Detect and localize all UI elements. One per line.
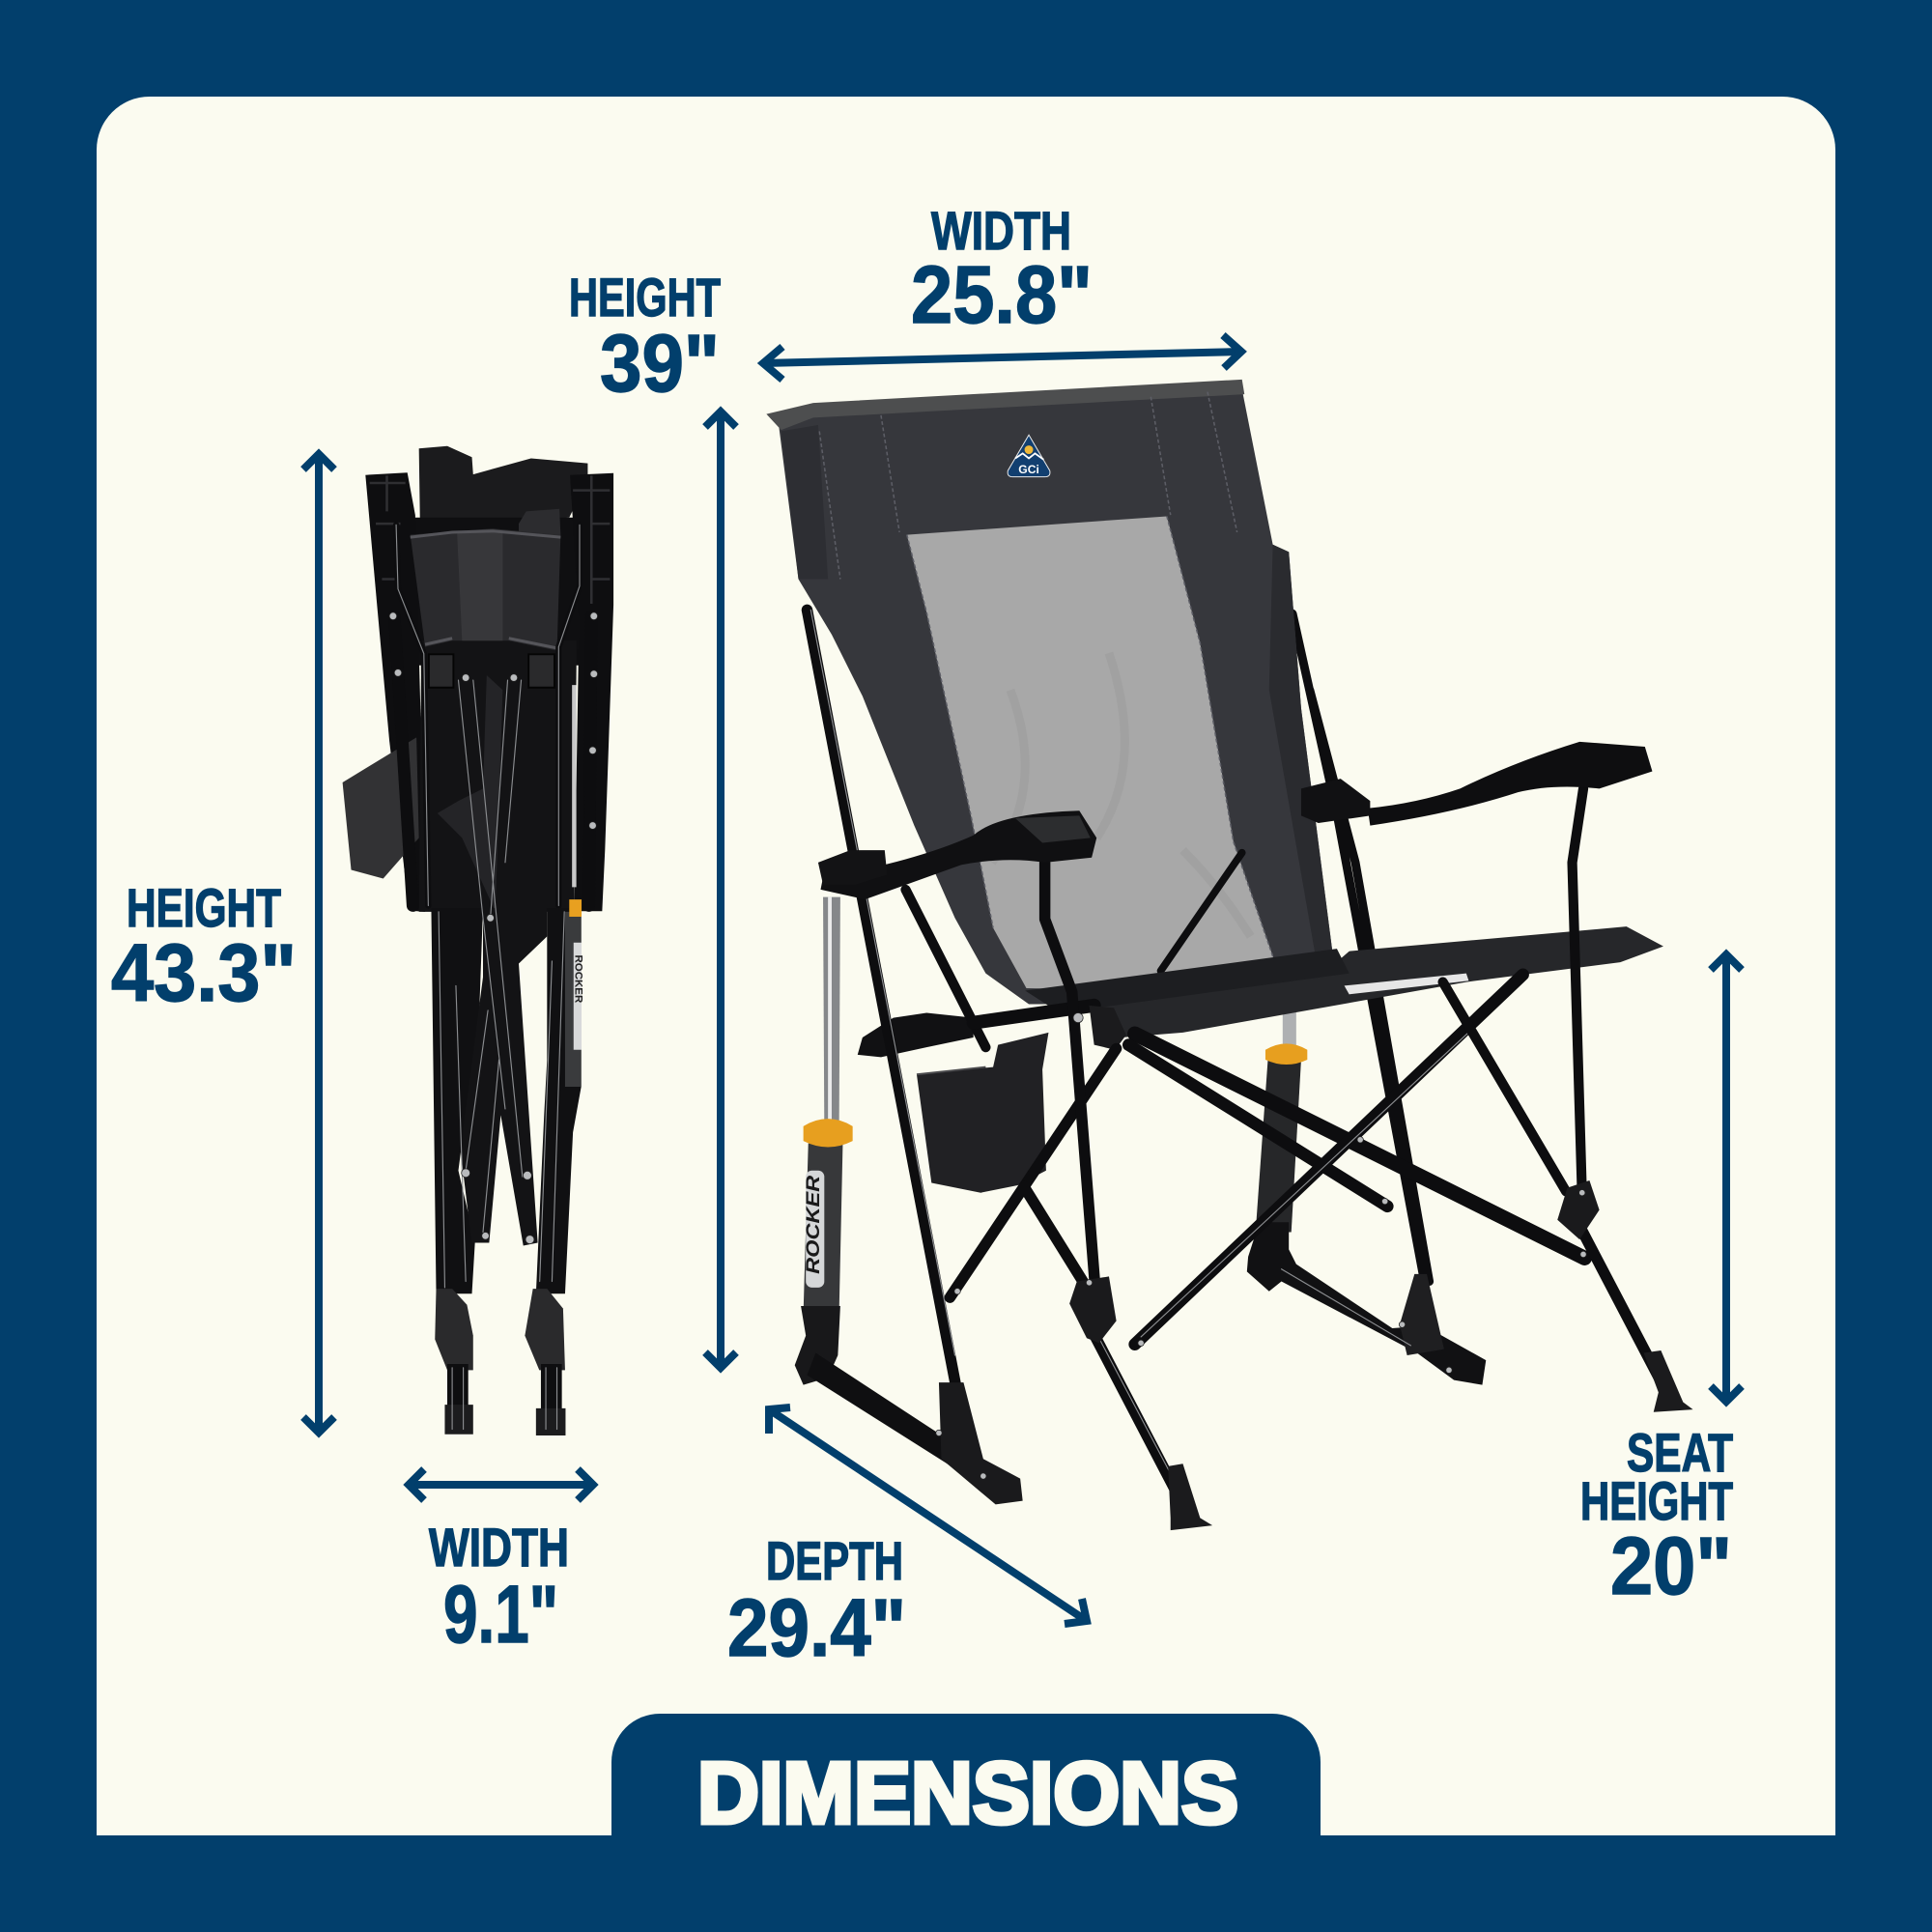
upright highlight xyxy=(810,610,955,1355)
chair bolts xyxy=(936,1012,1586,1479)
folded: left panel lattice xyxy=(370,475,406,579)
folded: dark backing behind pockets xyxy=(407,518,579,666)
label: seat height xyxy=(1580,1422,1733,1611)
folded: left plastic panel xyxy=(365,472,425,912)
arrow: depth xyxy=(769,1407,1087,1624)
rear rocker cylinder xyxy=(1256,1060,1301,1233)
label: depth: 29.4" xyxy=(727,1582,906,1673)
lower middle tube xyxy=(1024,1186,1087,1288)
right rear strut xyxy=(1443,982,1566,1191)
folded: chrome strip xyxy=(573,685,576,887)
front leg post xyxy=(1045,863,1096,1306)
folded: central dark body xyxy=(419,640,577,912)
folded: foot bars xyxy=(447,1364,562,1410)
label: chair width: 25.8" xyxy=(911,249,1093,340)
left inner tube xyxy=(905,890,985,1047)
seat label xyxy=(1345,974,1468,994)
folded: cup holder xyxy=(343,737,419,878)
rear chrome rod xyxy=(1283,1008,1296,1047)
front leg joint xyxy=(1069,1276,1117,1343)
rear bar highlight xyxy=(1282,1269,1410,1346)
front foot xyxy=(1168,1463,1212,1530)
folded: side rails xyxy=(394,616,591,905)
folded: flat highlights xyxy=(439,680,564,1288)
left armrest xyxy=(820,810,1096,899)
folded: rocker label xyxy=(573,943,584,1050)
left armrest top highlight xyxy=(1015,815,1091,842)
folded: plastic clips xyxy=(429,654,554,688)
seat fabric xyxy=(1094,926,1663,1037)
label: folded height xyxy=(111,877,297,1018)
cup holder xyxy=(917,1033,1048,1193)
folded: orange collar xyxy=(569,899,582,917)
title: DIMENSIONS xyxy=(697,1746,1238,1842)
rear leg joint xyxy=(1400,1274,1444,1355)
left hardware block xyxy=(858,1012,974,1057)
folded: pocket seams xyxy=(411,531,560,648)
left rocker cylinder xyxy=(804,1144,842,1314)
mesh panel xyxy=(907,516,1301,989)
GCI logo badge: GCi xyxy=(1018,463,1039,476)
arrow: chair height xyxy=(705,412,736,1368)
rear orange collar xyxy=(1265,1043,1307,1065)
ROCKER label xyxy=(804,1171,824,1288)
right side darker band xyxy=(1269,545,1334,967)
right front leg xyxy=(1579,1226,1663,1386)
title tab xyxy=(611,1714,1321,1842)
label: chair width xyxy=(911,200,1093,340)
folded: rocker label: ROCKER xyxy=(573,955,584,1004)
folded: feet xyxy=(444,1405,565,1435)
arrow: chair width xyxy=(763,335,1241,380)
mesh diagonal brace xyxy=(1161,853,1242,971)
right armrest xyxy=(1368,742,1652,826)
label: chair height: 39" xyxy=(600,318,720,409)
chrome highlight xyxy=(829,897,832,1123)
label: seat height: HEIGHT xyxy=(1580,1470,1733,1531)
arrow: seat height xyxy=(1711,954,1742,1402)
folded: rocker cylinder xyxy=(565,912,582,1087)
seat hinge xyxy=(1090,1006,1126,1050)
back stitching xyxy=(819,392,1274,960)
label: folded width: WIDTH xyxy=(429,1517,569,1577)
right joint xyxy=(1557,1180,1600,1239)
crossing tube xyxy=(1135,975,1523,1345)
ROCKER label: ROCKER xyxy=(804,1176,824,1274)
seat edge band xyxy=(1025,949,1350,1012)
folded: right panel lattice xyxy=(573,475,610,604)
rear rocker base xyxy=(1247,1222,1486,1385)
folded: fabric pockets xyxy=(411,528,560,650)
label: chair width: WIDTH xyxy=(931,200,1071,261)
front X long flat brace xyxy=(1135,1034,1584,1258)
folded: tube top of pocket xyxy=(519,509,560,535)
left rocker joint xyxy=(795,1306,840,1385)
small left cross xyxy=(950,1048,1117,1297)
left rear upright xyxy=(807,610,956,1387)
crossing highlight xyxy=(1141,1029,1472,1337)
label: folded width xyxy=(429,1517,569,1660)
chair back fabric xyxy=(779,389,1334,1005)
label: folded width: 9.1" xyxy=(443,1569,558,1660)
label: folded height: 43.3" xyxy=(111,927,297,1018)
arrow: folded height xyxy=(303,454,334,1433)
folded: left foot joint xyxy=(435,1289,473,1370)
label: depth: DEPTH xyxy=(766,1530,903,1591)
label: chair height xyxy=(569,267,721,409)
folded: lower fabric xyxy=(438,675,502,912)
label: depth xyxy=(727,1530,906,1673)
folded chair photo xyxy=(343,446,613,1435)
folded: top fabric xyxy=(407,446,587,532)
folded: right leg group xyxy=(536,908,582,1293)
left back shading xyxy=(781,425,828,579)
rear frame tubes behind the fabric xyxy=(1293,613,1430,1282)
label: chair height: HEIGHT xyxy=(569,267,721,327)
folded: centre X mass xyxy=(461,908,547,1246)
arrow: folded width xyxy=(409,1469,593,1500)
left rocker base bar xyxy=(807,1353,952,1466)
left chrome rod xyxy=(823,897,840,1127)
front leg lower tube xyxy=(1095,1337,1185,1509)
label: folded height: HEIGHT xyxy=(127,877,281,938)
folded: tube highlights xyxy=(396,525,580,905)
right arm hardware xyxy=(1301,779,1370,823)
mesh folds xyxy=(992,653,1251,936)
right foot xyxy=(1644,1350,1693,1412)
front leg highlight xyxy=(1100,1341,1182,1497)
unfolded rocking chair photo xyxy=(766,380,1693,1530)
cup holder rim xyxy=(917,1067,985,1074)
folded: right plastic panel xyxy=(570,473,613,911)
back top band xyxy=(766,380,1244,430)
folded: bolts xyxy=(389,612,598,1244)
folded: upper frame tubes xyxy=(396,525,580,905)
left orange collar xyxy=(804,1119,853,1147)
folded: left leg group xyxy=(431,908,483,1293)
right upright xyxy=(1573,788,1583,1195)
left rear leg foot xyxy=(939,1382,1023,1504)
left arm pivot hardware xyxy=(818,850,887,885)
folded: centre pocket lighter xyxy=(457,531,502,640)
under-seat cross bar xyxy=(974,1006,1094,1023)
label: seat height: 20" xyxy=(1610,1520,1732,1611)
GCI logo badge xyxy=(1008,435,1050,477)
label: seat height: SEAT xyxy=(1627,1422,1733,1483)
folded: foot highlights xyxy=(452,1368,557,1430)
front X short flat brace xyxy=(1128,1045,1387,1207)
folded: right foot joint xyxy=(525,1289,565,1370)
